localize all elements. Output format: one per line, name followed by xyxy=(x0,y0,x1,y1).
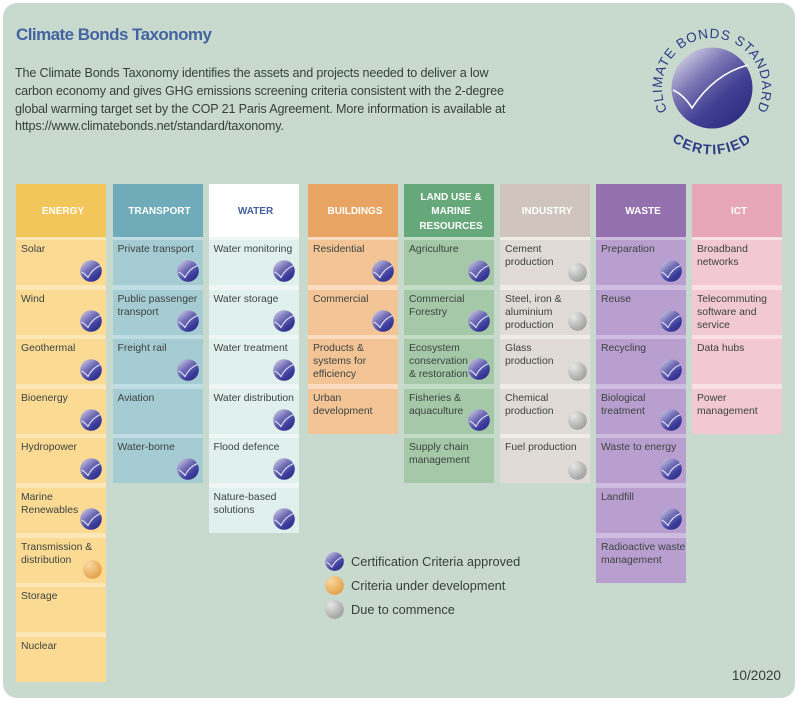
heading: transport xyxy=(112,184,202,237)
cell: supply chain management: Supply chain xyxy=(409,442,468,453)
cell: recycling: Recycling xyxy=(601,343,646,354)
heading: buildings: BUILDINGS xyxy=(328,206,382,217)
cell: freight rail xyxy=(112,339,202,384)
cell: water distribution: Water distribution xyxy=(214,393,294,404)
cell: fuel production xyxy=(500,438,590,483)
heading: waste: WASTE xyxy=(625,206,661,217)
cell: waste to energy xyxy=(596,438,686,483)
cell: water-borne xyxy=(112,438,202,483)
heading: energy xyxy=(16,184,106,237)
panel: waste column xyxy=(596,184,686,583)
panel: energy column xyxy=(16,184,106,682)
cell: solar xyxy=(16,240,106,285)
cell: urban development xyxy=(308,389,398,434)
cell: residential: Residential xyxy=(313,244,364,255)
heading: ICT: ICT xyxy=(731,206,747,217)
cell: commercial xyxy=(308,290,398,335)
icon: Climate Bonds Standard certified seal xyxy=(652,28,772,154)
cell: public passenger transport: Public passenger xyxy=(118,294,197,305)
cell: glass production xyxy=(500,339,590,384)
panel: industry column xyxy=(500,184,590,483)
date: 10/2020 xyxy=(732,668,781,682)
cell: telecommuting software and service: service xyxy=(697,320,730,331)
heading: land use and marine resources: RESOURCES xyxy=(419,221,483,232)
cell: agriculture xyxy=(404,240,494,285)
cell: chemical production: production xyxy=(505,406,554,417)
heading: land use and marine resources: MARINE xyxy=(431,206,471,217)
panel: water column xyxy=(208,184,298,533)
cell: geothermal: Geothermal xyxy=(21,343,75,354)
cell: water monitoring xyxy=(208,240,298,285)
cell: broadband networks: networks xyxy=(697,257,739,268)
cell: telecommuting software and service xyxy=(692,290,782,335)
cell: products and systems for efficiency: Products & xyxy=(313,343,364,354)
cell: solar: Solar xyxy=(21,244,45,255)
cell: public passenger transport: transport xyxy=(118,307,159,318)
cell: reuse: Reuse xyxy=(601,294,631,305)
cell: ecosystem conservation and restoration: conservation xyxy=(409,356,468,367)
cell: biological treatment: Biological xyxy=(601,393,645,404)
cell: data hubs: Data hubs xyxy=(697,343,744,354)
cell: telecommuting software and service: software and xyxy=(697,307,756,318)
heading: transport: TRANSPORT xyxy=(128,206,191,217)
cell: preparation: Preparation xyxy=(601,244,655,255)
cell: hydropower xyxy=(16,438,106,483)
cell: private transport xyxy=(112,240,202,285)
cell: broadband networks: Broadband xyxy=(697,244,748,255)
cell: chemical production: Chemical xyxy=(505,393,548,404)
title: Climate Bonds Taxonomy xyxy=(16,25,211,44)
cell: nature-based solutions xyxy=(208,488,298,533)
cell: power management xyxy=(692,389,782,434)
cell: commercial forestry xyxy=(404,290,494,335)
icon: legend due to commence xyxy=(325,600,344,619)
cell: steel, iron and aluminium production: aluminium xyxy=(505,307,552,318)
cell: nature-based solutions: solutions xyxy=(214,505,255,516)
cell: urban development: Urban xyxy=(313,393,341,404)
cell: supply chain management xyxy=(404,438,494,483)
cell: public passenger transport xyxy=(112,290,202,335)
legend label: approved: Certification Criteria approved xyxy=(351,554,520,569)
panel: ICT column xyxy=(692,184,782,434)
cell: agriculture: Agriculture xyxy=(409,244,459,255)
cell: fuel production: Fuel production xyxy=(505,442,577,453)
heading: water: WATER xyxy=(238,206,273,217)
cell: fisheries and aquaculture: Fisheries & xyxy=(409,393,461,404)
cell: biological treatment xyxy=(596,389,686,434)
heading: industry xyxy=(500,184,590,237)
intro text block xyxy=(15,66,506,133)
cell: fisheries and aquaculture xyxy=(404,389,494,434)
cell: bioenergy xyxy=(16,389,106,434)
icon: Climate Bonds Standard certified seal: CERTIFIED xyxy=(674,134,749,154)
cell: fisheries and aquaculture: aquaculture xyxy=(409,406,463,417)
cell: ecosystem conservation and restoration: & restoration xyxy=(409,369,468,380)
cell: water treatment: Water treatment xyxy=(214,343,288,354)
cell: glass production: Glass xyxy=(505,343,532,354)
cell: water-borne: Water-borne xyxy=(118,442,175,453)
icon: Climate Bonds Standard certified seal: CLIMATE BONDS STANDARD xyxy=(652,28,772,112)
cell: power management: management xyxy=(697,406,758,417)
cell: bioenergy: Bioenergy xyxy=(21,393,68,404)
cell: storage xyxy=(16,587,106,632)
cell: ecosystem conservation and restoration xyxy=(404,339,494,384)
cell: waste to energy: Waste to energy xyxy=(601,442,676,453)
cell: freight rail: Freight rail xyxy=(118,343,167,354)
cell: wind xyxy=(16,290,106,335)
cell: marine renewables: Renewables xyxy=(21,505,78,516)
cell: telecommuting software and service: Telecommuting xyxy=(697,294,767,305)
cell: flood defence xyxy=(208,438,298,483)
cell: steel, iron and aluminium production: production xyxy=(505,320,554,331)
cell: marine renewables: Marine xyxy=(21,492,53,503)
cell: radioactive waste management: management xyxy=(601,555,662,566)
cell: water monitoring: Water monitoring xyxy=(214,244,292,255)
cell: supply chain management: management xyxy=(409,455,470,466)
intro text block: global warming target set by the COP 21 Paris Agreement. More information is available at xyxy=(15,102,505,116)
heading: water xyxy=(208,184,298,237)
heading: ICT xyxy=(692,184,782,237)
cell: recycling xyxy=(596,339,686,384)
cell: chemical production xyxy=(500,389,590,434)
cell: residential xyxy=(308,240,398,285)
cell: nuclear: Nuclear xyxy=(21,641,57,652)
icon: legend approved xyxy=(325,552,344,571)
heading: land use and marine resources xyxy=(404,184,494,237)
cell: flood defence: Flood defence xyxy=(214,442,279,453)
cell: ecosystem conservation and restoration: Ecosystem xyxy=(409,343,460,354)
cell: products and systems for efficiency: systems for xyxy=(313,356,366,367)
cell: cement production: Cement xyxy=(505,244,541,255)
cell: marine renewables xyxy=(16,488,106,533)
cell: commercial forestry: Forestry xyxy=(409,307,447,318)
cell: commercial: Commercial xyxy=(313,294,368,305)
cell: transmission and distribution xyxy=(16,538,106,583)
cell: aviation: Aviation xyxy=(118,393,154,404)
cell: cement production xyxy=(500,240,590,285)
cell: glass production: production xyxy=(505,356,554,367)
cell: radioactive waste management xyxy=(596,538,686,583)
heading: buildings xyxy=(308,184,398,237)
cell: radioactive waste management: Radioactive waste xyxy=(601,542,685,553)
panel: transport column xyxy=(112,184,202,483)
cell: landfill: Landfill xyxy=(601,492,634,503)
cell: urban development: development xyxy=(313,406,372,417)
cell: water distribution xyxy=(208,389,298,434)
cell: geothermal xyxy=(16,339,106,384)
cell: steel, iron and aluminium production: Steel, iron & xyxy=(505,294,562,305)
legend label: under development: Criteria under development xyxy=(351,578,505,593)
heading: land use and marine resources: LAND USE & xyxy=(420,192,482,203)
intro text block: https://www.climatebonds.net/standard/taxonomy. xyxy=(15,119,284,133)
cell: preparation xyxy=(596,240,686,285)
intro text block: The Climate Bonds Taxonomy identifies the assets and projects needed to deliver a low xyxy=(15,66,488,80)
cell: water storage: Water storage xyxy=(214,294,278,305)
cell: hydropower: Hydropower xyxy=(21,442,77,453)
cell: transmission and distribution: distribution xyxy=(21,555,71,566)
cell: biological treatment: treatment xyxy=(601,406,645,417)
cell: private transport: Private transport xyxy=(118,244,194,255)
cell: water treatment xyxy=(208,339,298,384)
heading: industry: INDUSTRY xyxy=(522,206,572,217)
cell: steel, iron and aluminium production xyxy=(500,290,590,335)
cell: wind: Wind xyxy=(21,294,45,305)
icon: legend under development xyxy=(325,576,344,595)
cell: nuclear xyxy=(16,637,106,682)
cell: reuse xyxy=(596,290,686,335)
cell: commercial forestry: Commercial xyxy=(409,294,464,305)
cell: water storage xyxy=(208,290,298,335)
cell: products and systems for efficiency xyxy=(308,339,398,384)
cell: data hubs xyxy=(692,339,782,384)
legend label: due to commence: Due to commence xyxy=(351,602,455,617)
panel: land use and marine resources column xyxy=(404,184,494,483)
cell: power management: Power xyxy=(697,393,726,404)
cell: storage: Storage xyxy=(21,591,57,602)
intro text block: carbon economy and gives GHG emissions screening criteria consistent with the 2-degree xyxy=(15,84,504,98)
cell: aviation xyxy=(112,389,202,434)
cell: cement production: production xyxy=(505,257,554,268)
cell: broadband networks xyxy=(692,240,782,285)
heading: waste xyxy=(596,184,686,237)
panel: buildings column xyxy=(308,184,398,434)
cell: landfill xyxy=(596,488,686,533)
heading: energy: ENERGY xyxy=(42,206,84,217)
cell: products and systems for efficiency: efficiency xyxy=(313,369,356,380)
cell: transmission and distribution: Transmission & xyxy=(21,542,92,553)
cell: nature-based solutions: Nature-based xyxy=(214,492,276,503)
